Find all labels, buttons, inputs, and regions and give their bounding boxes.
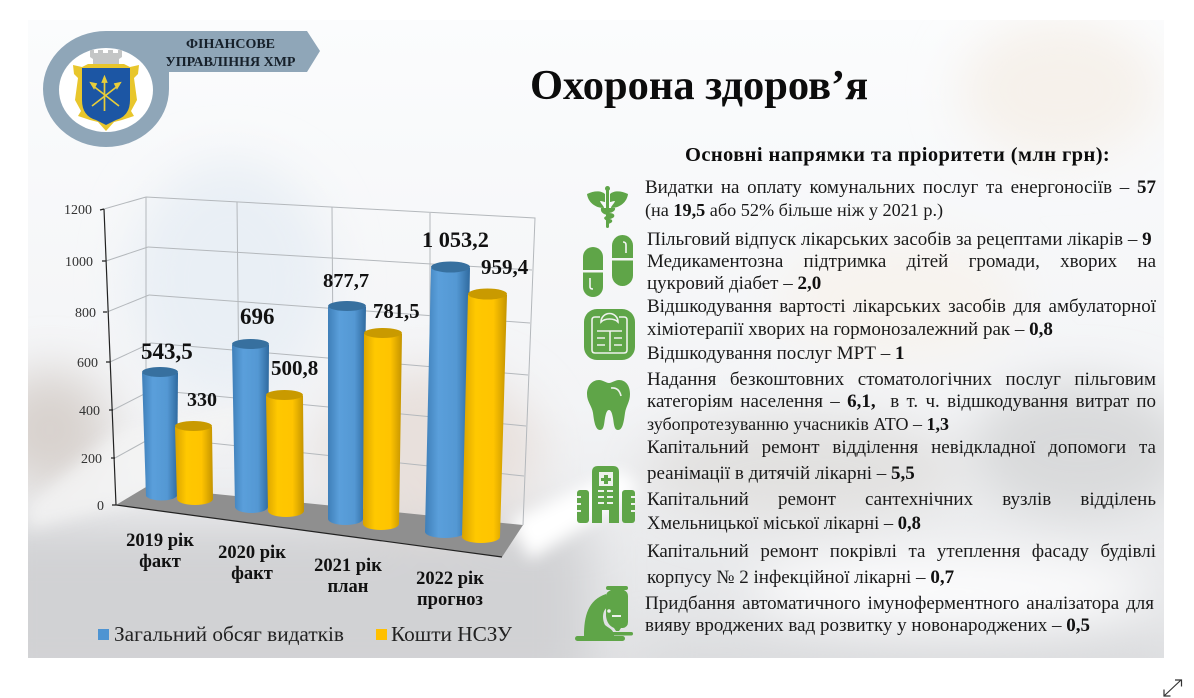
axis labels: 400: [79, 404, 100, 419]
axis labels: 1200: [64, 203, 92, 218]
bars 2020: [232, 339, 304, 517]
logo text: [166, 37, 296, 70]
axis labels: 800: [75, 306, 96, 321]
item: dental: Надання безкоштовних стоматологічних послуг пільговим: [647, 369, 1156, 390]
item: dental: зубопротезуванню учасників АТО – 1,3: [647, 414, 949, 434]
logo text: ФІНАНСОВЕ: [186, 37, 275, 52]
axis labels: [64, 203, 104, 514]
icon: caduceus: [587, 186, 628, 228]
logo text: УПРАВЛІННЯ ХМР: [166, 55, 296, 70]
logo: finance department badge: [43, 31, 320, 147]
data labels: 500,8: [271, 356, 318, 380]
item: compensation: хіміотерапії хворих на гормонозалежний рак – 0,8: [647, 319, 1053, 340]
data labels: 330: [187, 389, 217, 411]
data labels: 543,5: [141, 339, 193, 364]
category labels: [126, 531, 484, 610]
data labels: 877,7: [323, 270, 369, 292]
item: compensation: Відшкодування вартості лікарських засобів для амбулаторної: [647, 296, 1156, 317]
category labels: прогноз: [417, 590, 483, 610]
data labels: 781,5: [373, 301, 420, 323]
3D bar chart: [64, 196, 536, 610]
item: repairs: корпусу № 2 інфекційної лікарні – 0,7: [647, 567, 954, 588]
axis labels: 200: [81, 452, 102, 467]
item: utilities: Видатки на оплату комунальних послуг та енергоносіїв – 57: [645, 177, 1156, 198]
item: utilities: (на 19,5 або 52% більше ніж у 2021 р.): [645, 200, 943, 220]
item: analyzer: [645, 593, 1154, 636]
item: repairs: Капітальний ремонт сантехнічних вузлів відділень: [647, 489, 1156, 510]
bars 2019: [142, 367, 213, 505]
category labels: факт: [231, 564, 273, 584]
item: medicines: Пільговий відпуск лікарських засобів за рецептами лікарів – 9: [647, 229, 1152, 250]
axis labels: 1000: [65, 255, 93, 270]
data labels: 959,4: [481, 255, 529, 279]
category labels: план: [328, 577, 369, 597]
item: analyzer: Придбання автоматичного імуноферментного аналізатора для: [645, 593, 1154, 614]
item: medicines: Медикаментозна підтримка дітей громади, хворих на: [647, 251, 1156, 272]
item: repairs: Хмельницької міської лікарні – 0,8: [647, 514, 921, 534]
gridlines and walls: [104, 197, 535, 525]
item: compensation: Відшкодування послуг МРТ – 1: [647, 343, 905, 364]
icon: scale monitor: [584, 309, 635, 360]
item: repairs: [647, 437, 1156, 588]
item: dental: категоріям населення – 6,1, в т. ч. відшкодування витрат по: [647, 391, 1156, 412]
item: compensation: [647, 296, 1156, 364]
floor: [116, 487, 523, 557]
item: utilities: [645, 177, 1156, 220]
axis: [100, 209, 502, 557]
priorities list: [645, 177, 1156, 636]
category labels: 2019 рік: [126, 531, 194, 551]
icon: pills: [583, 235, 633, 297]
icon: microscope: [575, 586, 633, 641]
bars 2022: [425, 262, 507, 543]
subheading: Основні напрямки та пріоритети (млн грн):: [685, 144, 1110, 166]
category labels: 2021 рік: [314, 556, 382, 576]
item: repairs: Капітальний ремонт відділення невідкладної допомоги та: [647, 437, 1156, 458]
item: medicines: цукровий діабет – 2,0: [647, 273, 821, 294]
item: repairs: реанімації в дитячій лікарні – 5,5: [647, 463, 915, 484]
category labels: факт: [139, 552, 181, 572]
ribbon and ring: [43, 31, 320, 147]
legend item: total: Загальний обсяг видатків: [114, 622, 344, 646]
item: analyzer: вияву вроджених вад розвитку у новонароджених – 0,5: [645, 615, 1090, 636]
coat of arms: [73, 50, 139, 131]
icon: expand arrow: [1163, 679, 1182, 697]
data labels: 1 053,2: [422, 227, 489, 252]
icon: tooth: [587, 380, 630, 430]
legend: [98, 622, 513, 646]
axis labels: 0: [97, 499, 104, 514]
legend item: NHSU: Кошти НСЗУ: [391, 622, 513, 646]
item: repairs: Капітальний ремонт покрівлі та утеплення фасаду будівлі: [647, 541, 1156, 562]
title: Охорона здоров’я: [530, 62, 868, 109]
icon: hospital: [577, 466, 635, 523]
item: medicines: [647, 229, 1156, 294]
data labels: 696: [240, 304, 274, 329]
category labels: 2022 рік: [416, 569, 484, 589]
bars 2021: [328, 301, 402, 530]
category labels: 2020 рік: [218, 543, 286, 563]
data labels: [141, 227, 529, 411]
axis labels: 600: [77, 356, 98, 371]
item: dental: [647, 369, 1156, 434]
